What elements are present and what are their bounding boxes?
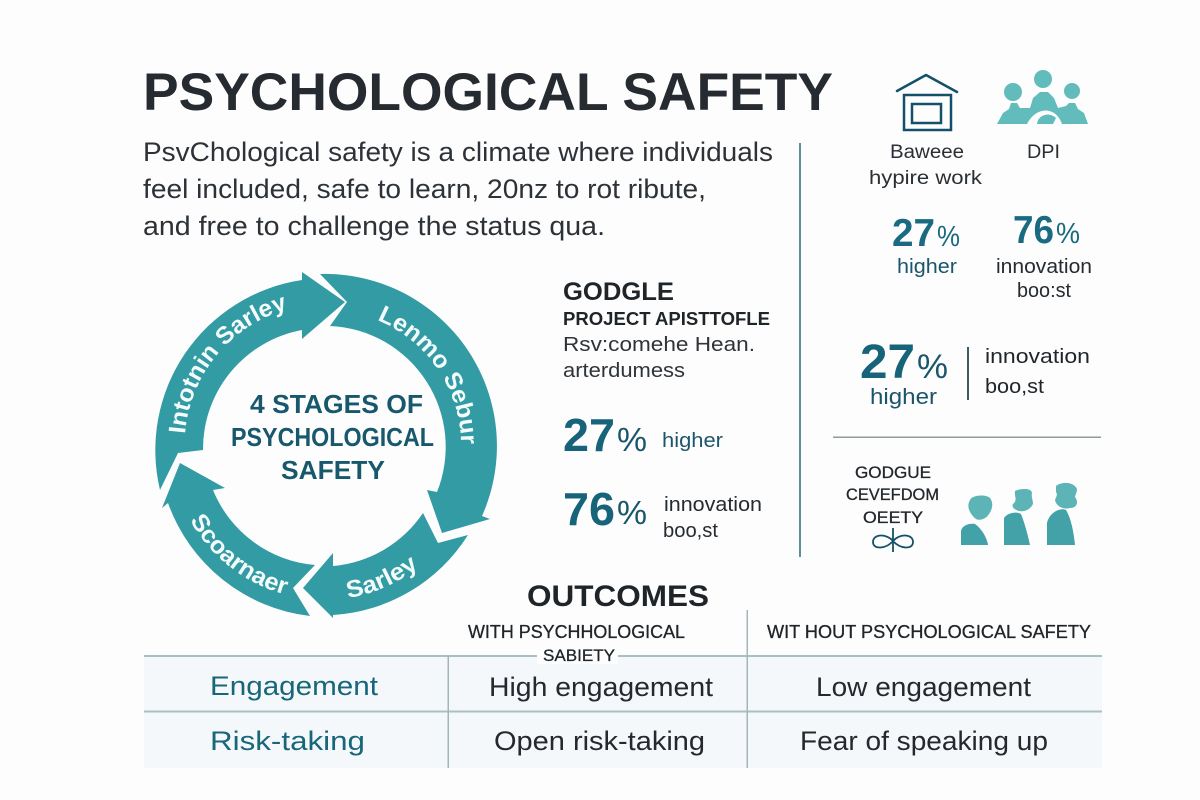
cycle centre label bbox=[231, 389, 434, 485]
title: PSYCHOLOGICAL SAFETY bbox=[143, 63, 833, 122]
stat: 27% higher, innovation boost: higher bbox=[870, 384, 937, 409]
stat: 27% higher, innovation boost: innovation bbox=[985, 346, 1090, 368]
label: CEVEFDOM bbox=[846, 485, 939, 504]
stat: 76% innovation boost: boo,st bbox=[663, 520, 718, 542]
cycle centre label: 4 STAGES OF bbox=[250, 389, 423, 419]
arrow: stage 1 bbox=[155, 272, 345, 490]
row: risk-taking: Open risk-taking bbox=[494, 726, 705, 756]
stat: 76% innovation boost: 76 bbox=[563, 483, 615, 535]
description bbox=[563, 334, 755, 382]
panel: Godgue freedom society bbox=[846, 463, 1077, 552]
label: GODGUE bbox=[855, 463, 931, 482]
heading: PROJECT APISTTOFLE bbox=[563, 309, 770, 329]
row: engagement: Low engagement bbox=[816, 672, 1032, 702]
stage label 1: Intotnin Sarley bbox=[168, 296, 284, 432]
stat: 27% higher: % bbox=[617, 421, 647, 458]
stage label 2: Lenmo Sebur bbox=[378, 306, 474, 444]
stage label 3: Sarley bbox=[346, 556, 415, 597]
stat: 27% higher: 27 bbox=[563, 409, 615, 461]
stat: 27% higher bbox=[563, 409, 723, 461]
arrow: stage 4 bbox=[162, 463, 315, 616]
arrow: stage 3 bbox=[303, 513, 468, 618]
icon: house bbox=[897, 75, 957, 130]
stat: 27% higher, innovation boost bbox=[860, 336, 1090, 409]
stat: 76% innovation boost: innovation bbox=[664, 494, 762, 516]
label bbox=[846, 463, 939, 527]
label: DPI: DPI bbox=[1027, 142, 1060, 163]
label: Baweee hypire work: Baweee bbox=[890, 142, 964, 163]
description: Rsv:comehe Hean. bbox=[563, 334, 755, 356]
icon: person 1 bbox=[961, 496, 992, 545]
icon: person 2 bbox=[1004, 489, 1033, 545]
column header: with: SABIETY bbox=[543, 646, 615, 665]
label: Baweee hypire work bbox=[869, 142, 983, 189]
cycle centre label: SAFETY bbox=[281, 455, 385, 485]
column header: without: WIT HOUT PSYCHOLOGICAL SAFETY bbox=[767, 622, 1091, 642]
label: OEETY bbox=[863, 508, 923, 527]
column header: with bbox=[468, 622, 685, 665]
stat: 27% higher, innovation boost: 27 bbox=[860, 336, 915, 389]
column header: with: WITH PSYCHHOLOGICAL bbox=[468, 622, 685, 642]
stat: 76%: innovation bbox=[996, 256, 1092, 278]
stage label 4: Scoarnaer bbox=[192, 514, 288, 594]
row: engagement bbox=[210, 671, 1032, 702]
panel: Google Project Aristotle bbox=[563, 278, 770, 542]
stat: 27%: % bbox=[937, 221, 960, 253]
outcomes table bbox=[144, 610, 1102, 768]
heading: outcomes: OUTCOMES bbox=[527, 580, 709, 613]
stat: 76% bbox=[996, 209, 1092, 302]
row: risk-taking: Fear of speaking up bbox=[800, 726, 1048, 756]
stat: 27% higher, innovation boost: % bbox=[917, 348, 948, 386]
heading bbox=[563, 278, 770, 329]
row: engagement: Engagement bbox=[210, 671, 379, 701]
row: risk-taking: Risk-taking bbox=[210, 726, 365, 756]
cycle diagram: 4 stages bbox=[155, 272, 497, 618]
icon: infinity knot bbox=[873, 528, 913, 552]
stat: 27%: 27 bbox=[892, 212, 935, 255]
stat: 27%: higher bbox=[897, 256, 957, 278]
description: arterdumess bbox=[563, 360, 685, 382]
row: risk-taking bbox=[210, 726, 1048, 756]
intro text block bbox=[143, 137, 773, 241]
arrow: stage 2 bbox=[320, 274, 497, 533]
row: engagement: High engagement bbox=[489, 672, 714, 702]
stat: 27% higher: higher bbox=[662, 430, 723, 452]
stat: 27% bbox=[892, 212, 960, 278]
label: Baweee hypire work: hypire work bbox=[869, 168, 983, 189]
heading: GODGLE bbox=[563, 278, 674, 306]
stat: 76%: % bbox=[1056, 218, 1080, 250]
stat: 76%: 76 bbox=[1013, 209, 1054, 252]
icon: team bbox=[997, 70, 1088, 124]
intro text block: PsvChological safety is a climate where individuals bbox=[143, 137, 773, 167]
icon: person 3 bbox=[1047, 483, 1077, 545]
stat: 76% innovation boost bbox=[563, 483, 762, 542]
intro text block: feel included, safe to learn, 20nz to rot ribute, bbox=[143, 174, 706, 204]
panel: right column stats bbox=[860, 70, 1092, 409]
intro text block: and free to challenge the status qua. bbox=[143, 211, 605, 241]
cycle centre label: PSYCHOLOGICAL bbox=[231, 422, 434, 452]
stat: 76% innovation boost: % bbox=[617, 494, 647, 531]
stat: 27% higher, innovation boost: boo,st bbox=[985, 376, 1044, 398]
stat: 76%: boo:st bbox=[1017, 280, 1071, 302]
